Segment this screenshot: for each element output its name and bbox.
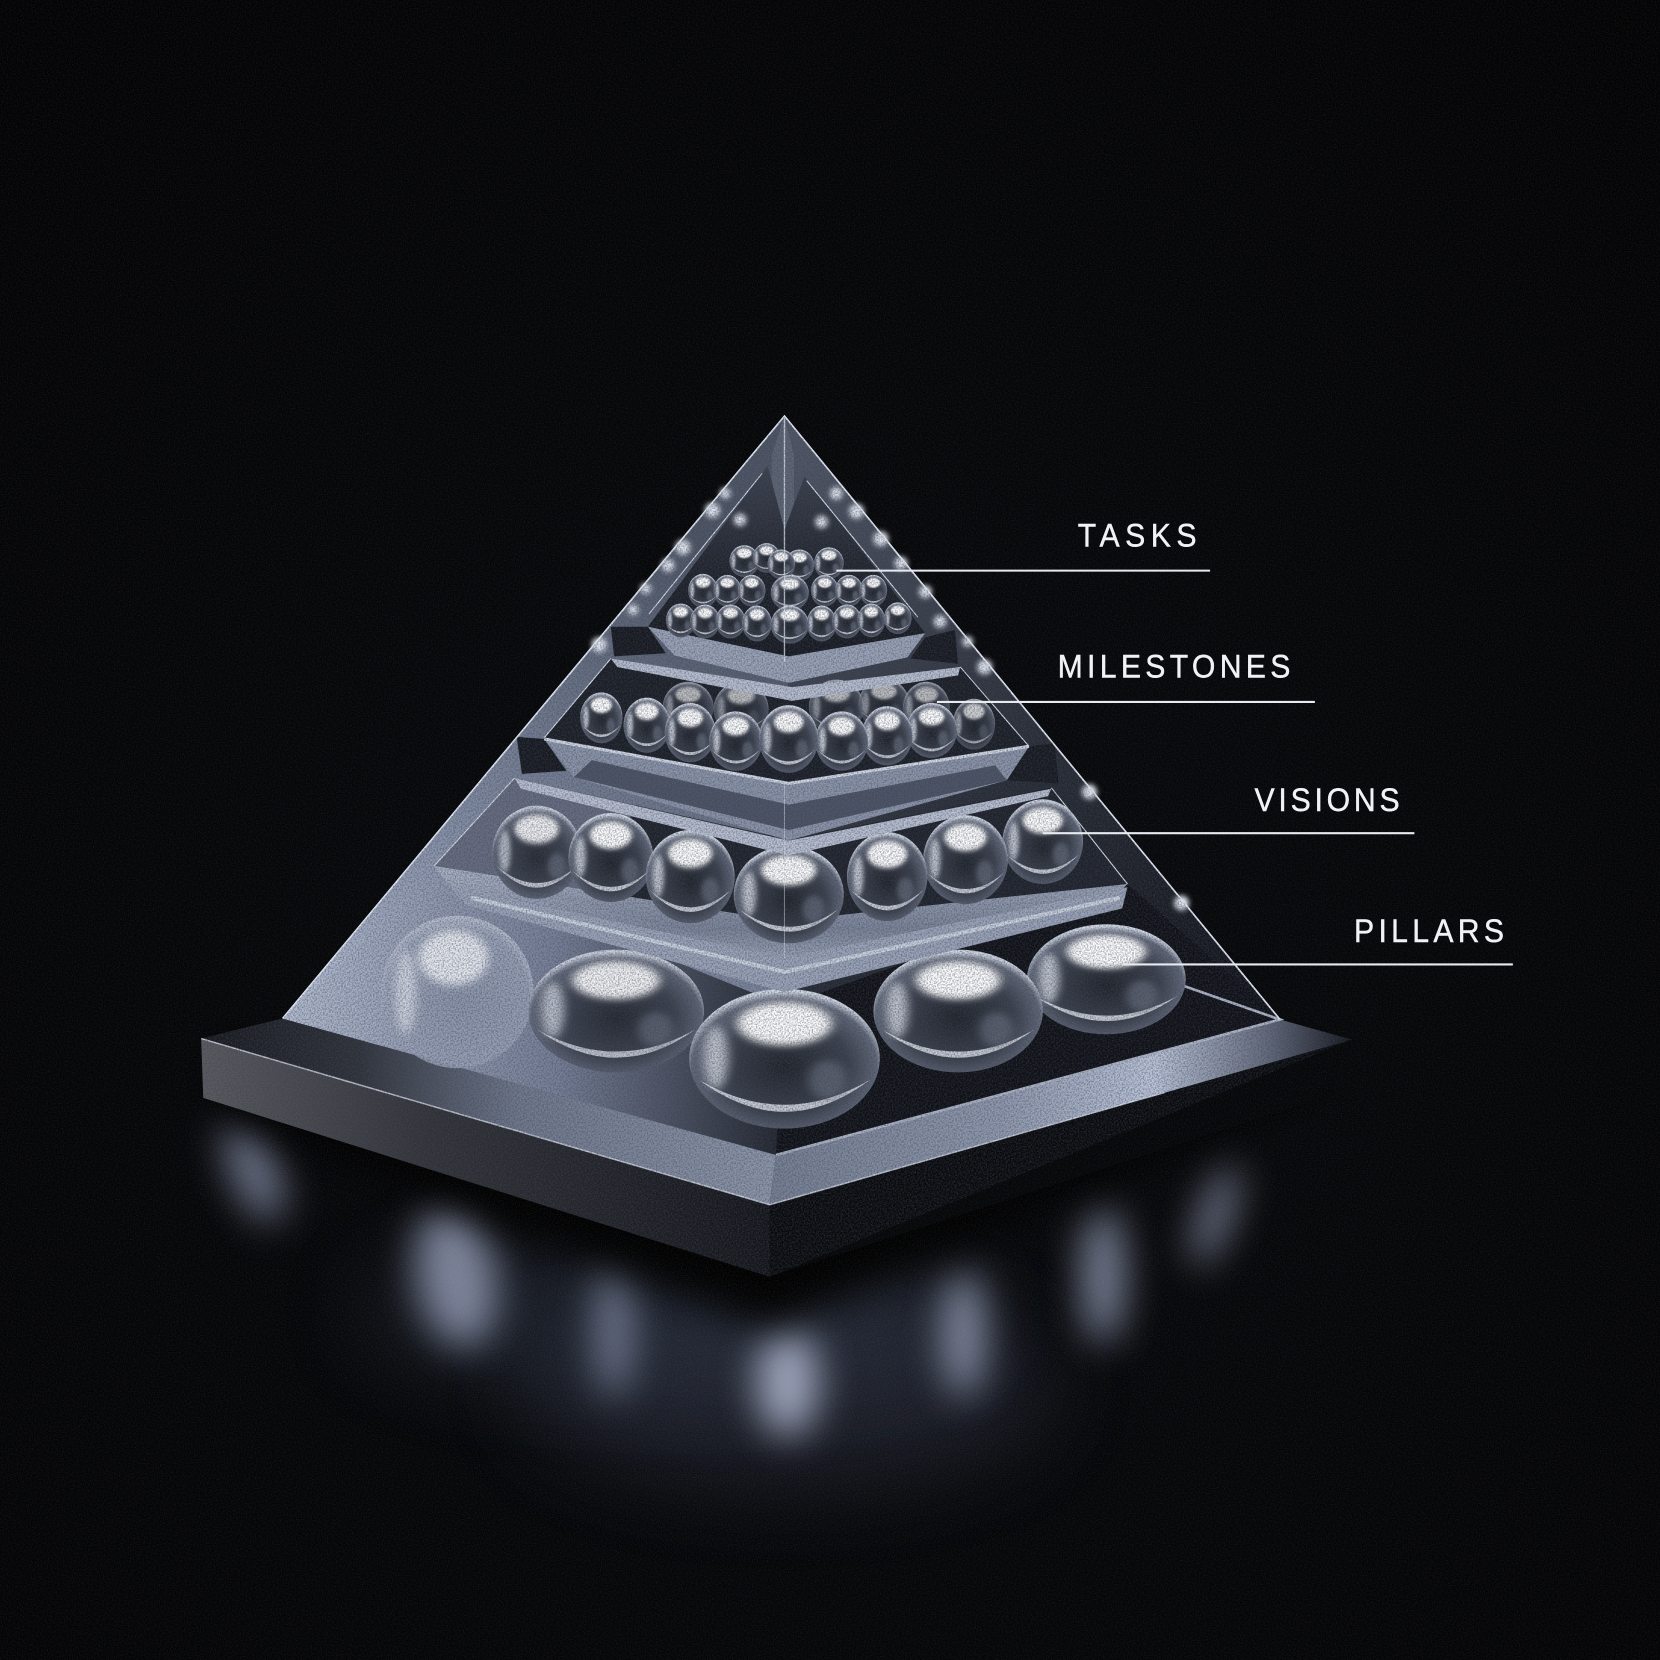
tier 1 spheres: tasks (666, 543, 912, 644)
tier 2 tray dark panel (574, 760, 1007, 830)
gap shadows left and right between tiers (517, 627, 1059, 783)
plate edge highlight (201, 1039, 1165, 1205)
tier 2 spheres: milestones (580, 679, 995, 773)
tier 1 tray (648, 627, 925, 683)
glass edges and inner lines (283, 416, 1280, 1020)
tier 3 spheres: visions (492, 799, 1083, 943)
label: tasks: TASKS (1078, 516, 1197, 554)
plate shadow on floor (212, 1038, 1313, 1329)
tier 2 tray (544, 739, 1029, 841)
pyramid (201, 416, 1352, 1277)
base plate (201, 1018, 1352, 1277)
plate back left sliver (201, 1018, 349, 1043)
plate top left band (201, 1018, 776, 1205)
plate right side (770, 1040, 1352, 1277)
plate under tier 2 (515, 778, 1051, 855)
tier 1 dark interior (648, 466, 925, 658)
tier 3 dark interior (434, 778, 1127, 958)
label: visions: VISIONS (1255, 781, 1400, 818)
tier 2 dark interior (544, 658, 1029, 786)
tier 3 tray front band (455, 887, 1127, 992)
right glass face (776, 416, 1280, 1155)
bokeh dots along pyramid edges (592, 487, 1189, 910)
grain on pyramid and plate (201, 416, 1352, 1277)
floor reflection (212, 1110, 1246, 1482)
tier 3 left wash (434, 778, 635, 900)
floor right rim (776, 979, 1280, 1155)
tier 3 tray (434, 866, 1127, 992)
label: milestones: MILESTONES (1058, 647, 1290, 685)
plate under tier 1 (611, 658, 960, 701)
floor left (283, 868, 784, 1155)
label: pillars: PILLARS (1354, 912, 1504, 950)
tier 2 tray upper rim (544, 739, 1029, 783)
floor right (776, 884, 1280, 1155)
tier 3 band highlight (471, 898, 1120, 972)
plate top right band (770, 1020, 1352, 1205)
apex central glass column (772, 416, 794, 551)
left glass face (283, 416, 789, 1155)
plate left side (201, 1039, 770, 1277)
tier 4 spheres: pillars (381, 916, 1186, 1129)
